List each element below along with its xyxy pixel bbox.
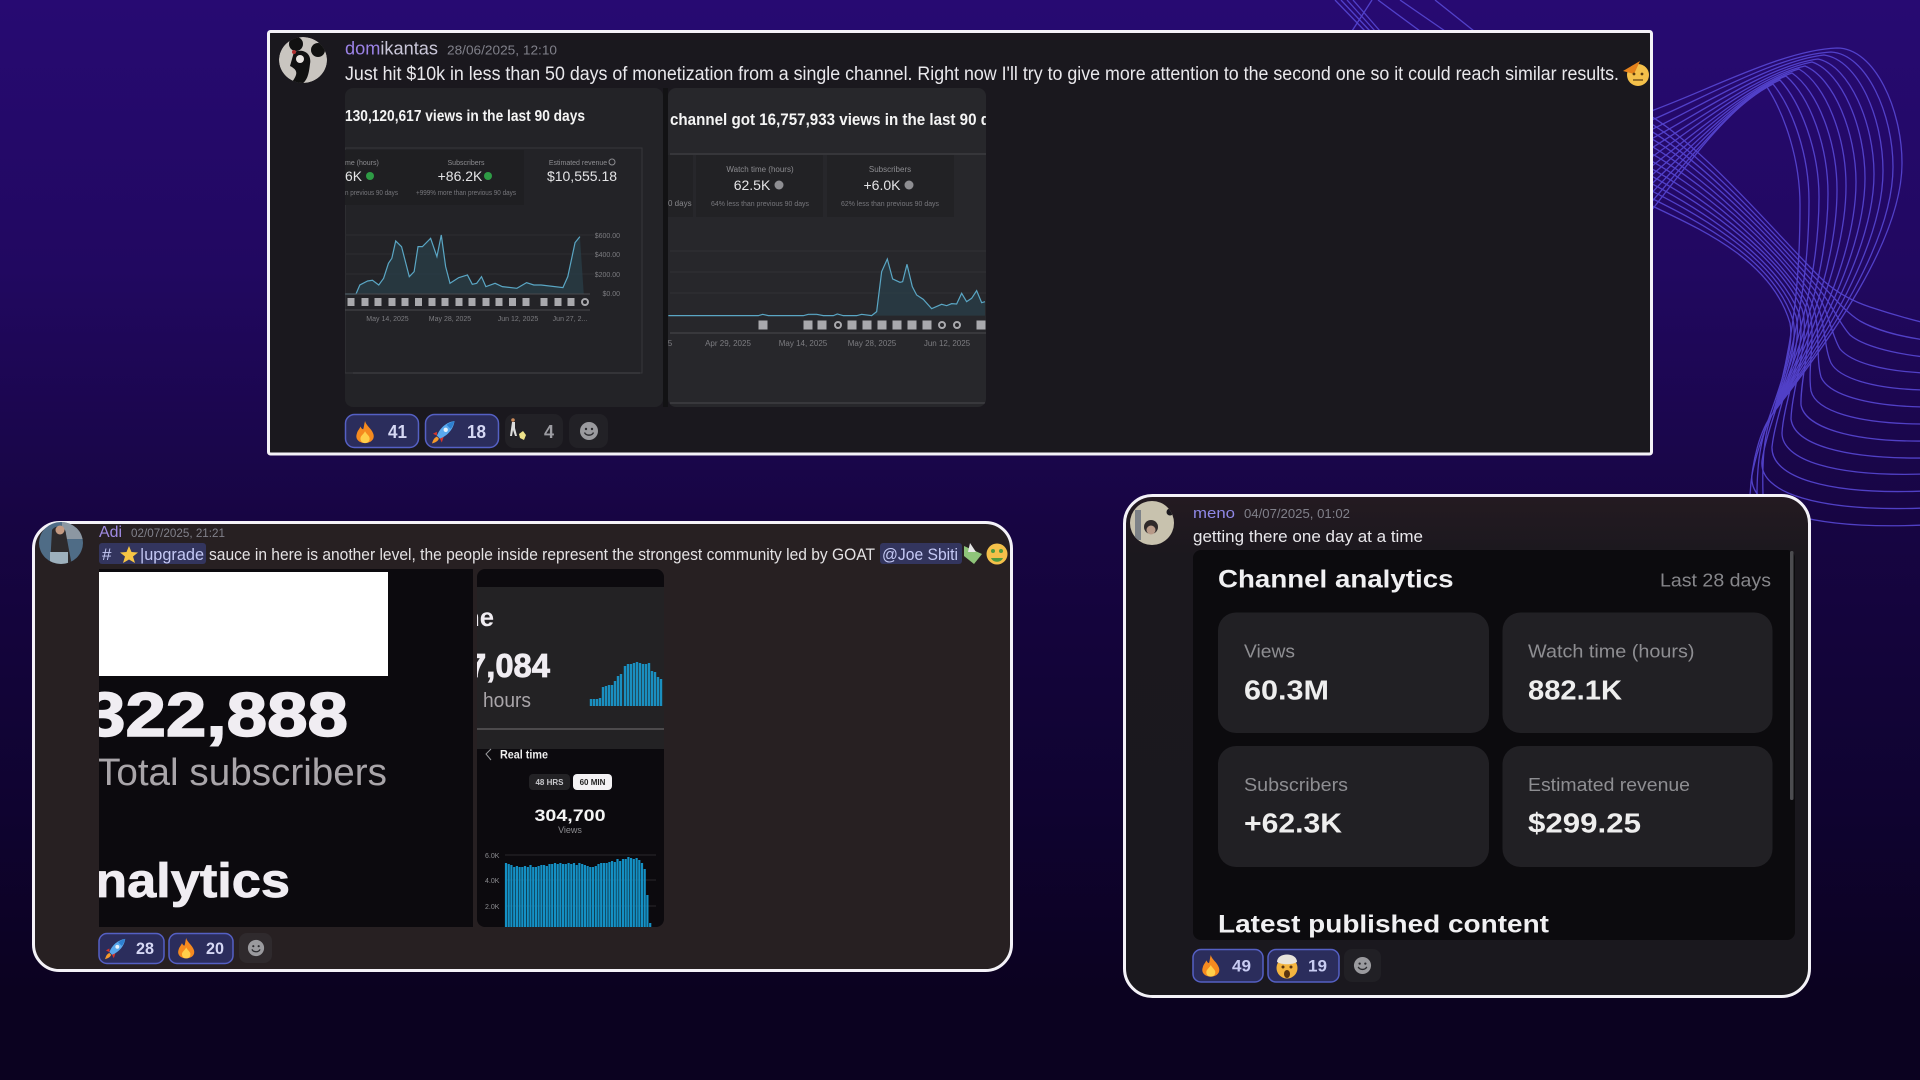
toggle: 60 min: 60 MIN (580, 778, 606, 787)
stat: watch time cut: me (hours) (345, 160, 379, 167)
line chart: views: 5 (668, 339, 673, 348)
stat: watch time (711, 165, 809, 208)
stat: subscribers: +999% more than previous 90 days (416, 190, 516, 197)
card: views: Views (1244, 641, 1295, 662)
stat cards dark band (668, 155, 954, 217)
reaction: rocket 18 (426, 414, 498, 448)
avatar: meno (1130, 501, 1174, 545)
line chart: revenue: $200.00 (595, 272, 620, 279)
channel tag (99, 543, 206, 564)
screenshot: second channel analytics: 0 days (668, 199, 692, 208)
scrollbar (1790, 551, 1794, 800)
stat: subscribers: Subscribers (448, 160, 485, 167)
reaction: fire 49: 49 (1232, 958, 1251, 976)
line chart: views: May 14, 2025 (779, 339, 828, 348)
bar chart: real time (485, 853, 656, 927)
subscriber label: Total subscribers (97, 752, 387, 794)
message author: Adi (99, 524, 122, 541)
stat: subscribers: Subscribers (869, 165, 911, 174)
message text: sauce in here is another level, the people inside represent the strongest community led by GOAT (209, 546, 875, 564)
line chart: revenue: $600.00 (595, 233, 620, 240)
reaction: fire 20: 20 (206, 940, 224, 958)
stat: watch time cut (345, 160, 398, 197)
screenshot heading: 130,120,617 views in the last 90 days (345, 108, 585, 125)
cropped heading: ne (464, 602, 494, 632)
reaction: mind blown 19: 19 (1308, 958, 1327, 976)
reaction: mind blown 19 (1268, 950, 1339, 982)
reaction: fire 41: 41 (388, 422, 407, 442)
avatar: Adi (39, 522, 83, 564)
line chart: revenue: May 28, 2025 (429, 316, 471, 323)
reaction: rocket 18: 18 (467, 422, 486, 442)
message text: Just hit $10k in less than 50 days of monetization from a single channel. Right now I'll try to give more attention to the second one so it could reach similar results. (345, 64, 1619, 85)
redacted white block (99, 572, 388, 676)
date range: Last 28 days (1660, 569, 1771, 590)
reaction: rocket 28 (99, 934, 164, 964)
channel analytics heading: Channel analytics (1218, 566, 1454, 594)
line chart: revenue: May 14, 2025 (366, 316, 409, 323)
card: subscribers: Subscribers (1244, 774, 1348, 795)
icon: saluting face emoji (1623, 61, 1649, 86)
reaction: rocket 28: 28 (136, 940, 154, 958)
stat: estimated revenue: $10,555.18 (547, 168, 617, 184)
line chart: revenue: $400.00 (595, 252, 620, 259)
card: watch time: Watch time (hours) (1528, 641, 1694, 662)
message author: domikantas (345, 39, 438, 59)
real time header (485, 748, 548, 760)
watch hours value: 7,084 (468, 647, 551, 684)
bar chart: real time: 2.0K (485, 904, 500, 911)
latest content heading: Latest published content (1218, 911, 1550, 939)
stat: estimated revenue (547, 159, 617, 184)
panel: meno message (1124, 496, 1810, 996)
watch hours label: hours (483, 690, 531, 712)
stat: subscribers: +86.2K (438, 168, 483, 184)
reaction: add reaction (1344, 949, 1381, 982)
channel tag: |upgrade (140, 546, 204, 564)
line chart: views: May 28, 2025 (848, 339, 897, 348)
line chart: revenue (345, 233, 620, 323)
line chart: revenue: Jun 12, 2025 (498, 316, 538, 323)
line chart: revenue: $0.00 (602, 291, 620, 298)
subscriber count: 322,888 (85, 681, 348, 750)
real time views value: 304,700 (534, 806, 606, 825)
screenshot heading: channel got 16,757,933 views in the last 90 d (670, 110, 990, 129)
line chart: views (668, 251, 986, 403)
reaction: fire 20 (169, 934, 233, 964)
line chart: views: Apr 29, 2025 (705, 339, 751, 348)
bar chart: real time: 6.0K (485, 853, 500, 860)
card: subscribers: +62.3K (1244, 808, 1342, 838)
reaction: sparkle 4: 4 (544, 422, 554, 442)
panel: domikantas message (268, 32, 1652, 454)
bar chart: hours (591, 662, 661, 706)
stat: watch time: 62.5K (734, 177, 771, 193)
card: watch time (1502, 612, 1772, 733)
icon: money mouth face (986, 544, 1008, 564)
mention: @Joe Sbiti (882, 546, 958, 564)
stat: subscribers: 62% less than previous 90 days (841, 199, 939, 208)
stat: subscribers (841, 165, 939, 208)
message text: getting there one day at a time (1193, 528, 1423, 546)
stat: watch time cut: n previous 90 days (345, 190, 398, 197)
message author: meno (1193, 505, 1235, 522)
card: estimated revenue (1502, 746, 1772, 867)
toggle: 48 hrs: 48 HRS (535, 778, 564, 787)
message timestamp: 04/07/2025, 01:02 (1244, 506, 1350, 521)
card: estimated revenue: $299.25 (1528, 808, 1641, 838)
panel: Adi message (34, 521, 1012, 970)
screenshot: second channel analytics (668, 88, 990, 407)
channel tag: # (102, 545, 112, 564)
avatar: domikantas (279, 37, 327, 84)
decorative wave pattern (1335, 0, 1920, 526)
bar chart: real time: 4.0K (485, 878, 500, 885)
screenshot gap (663, 88, 668, 407)
reaction: fire 41 (346, 414, 418, 448)
screenshot: first channel analytics (345, 88, 663, 407)
card: watch time: 882.1K (1528, 675, 1622, 706)
stat: subscribers (416, 160, 516, 197)
reaction: sparkle 4 (505, 414, 563, 448)
screenshot: total subscribers (66, 569, 473, 927)
card: subscribers (1218, 746, 1489, 867)
stat: estimated revenue: Estimated revenue (549, 160, 607, 167)
reaction: fire 49 (1193, 950, 1263, 982)
card: views (1218, 612, 1489, 733)
line chart: revenue: Jun 27, 2... (553, 316, 587, 323)
message timestamp: 02/07/2025, 21:21 (131, 526, 225, 540)
stat: watch time cut: 6K (345, 168, 363, 184)
icon: money with wings (964, 543, 982, 564)
screenshot: watch hours and real time (464, 569, 664, 927)
message timestamp: 28/06/2025, 12:10 (447, 43, 557, 58)
real time header: Real time (500, 748, 548, 762)
reaction: add reaction (239, 933, 272, 963)
toggle: 60 min (573, 774, 612, 790)
toggle: 48 hrs (529, 774, 570, 790)
stat: watch time: 64% less than previous 90 days (711, 199, 809, 208)
real time views label: Views (558, 825, 582, 835)
stat cards dark band (345, 150, 346, 205)
reaction: add reaction (569, 414, 608, 448)
card: views: 60.3M (1244, 675, 1329, 706)
screenshot: channel analytics (1193, 550, 1795, 940)
card: estimated revenue: Estimated revenue (1528, 774, 1690, 795)
line chart: views: Jun 12, 2025 (924, 339, 971, 348)
analytics heading: analytics (66, 855, 290, 908)
stat: watch time: Watch time (hours) (726, 165, 794, 174)
stat: subscribers: +6.0K (864, 177, 901, 193)
